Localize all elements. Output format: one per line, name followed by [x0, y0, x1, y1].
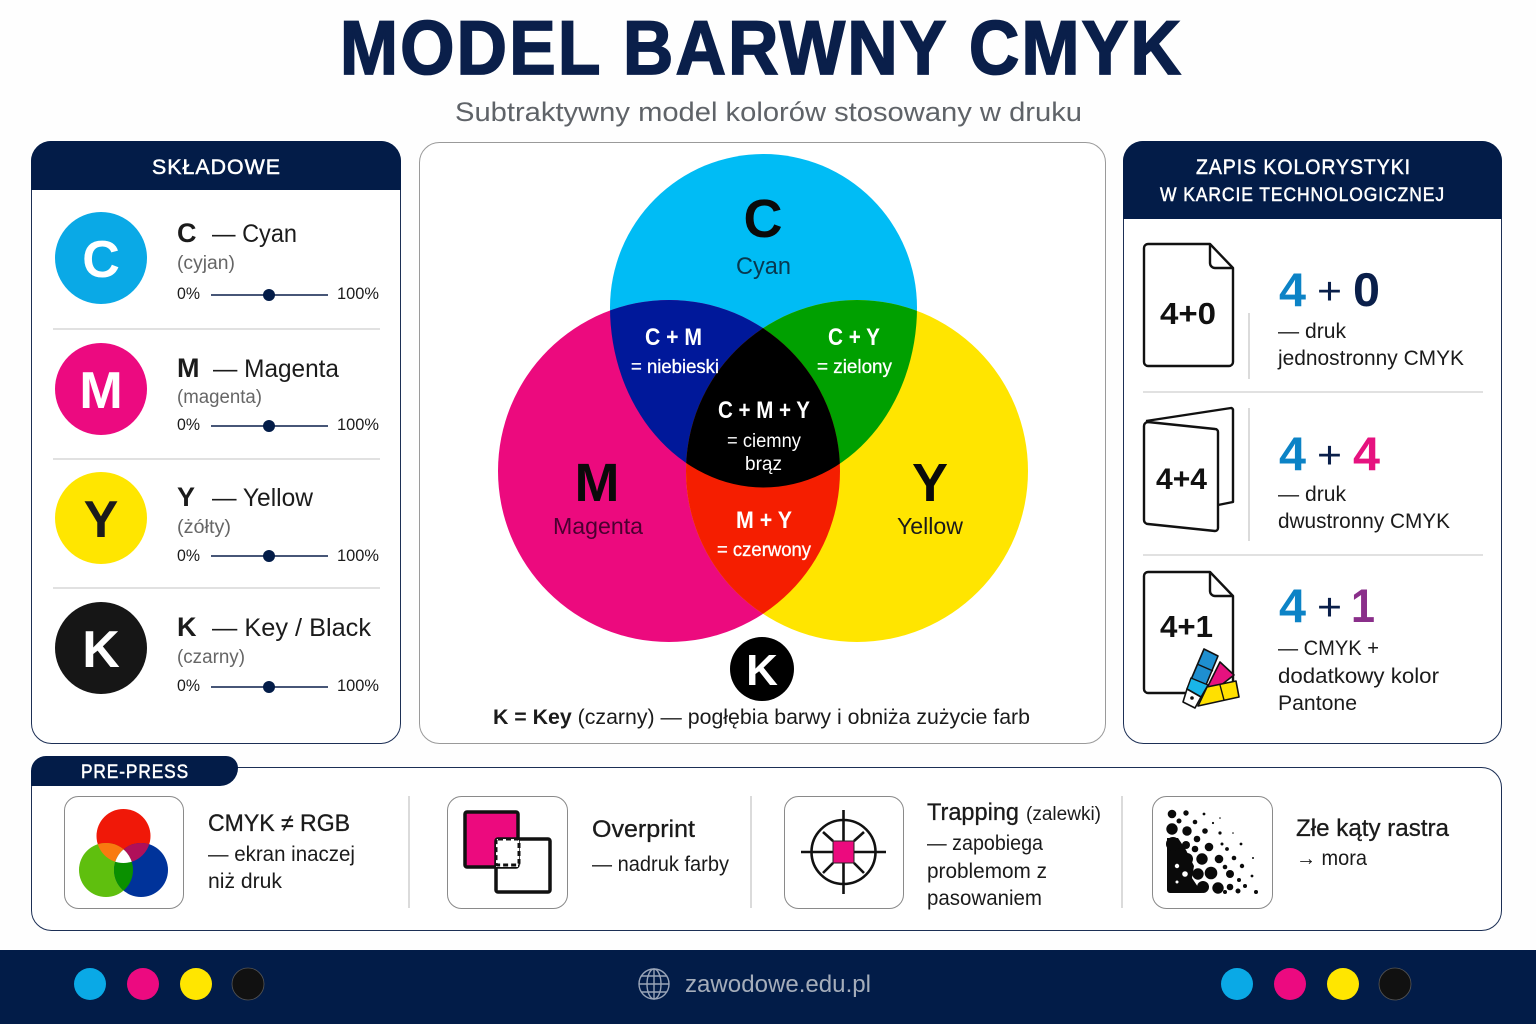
- text: overprint: Overprint: [592, 816, 695, 843]
- format 4+1: dodatkowy kolor: [1278, 665, 1439, 688]
- text: cmyk vs rgb: niż druk: [208, 870, 283, 893]
- text: trapping: [927, 799, 1101, 910]
- text: overprint: — nadruk farby: [592, 853, 729, 876]
- key badge: [730, 637, 794, 701]
- row: key black: 0%: [177, 676, 200, 695]
- panel header: zapis kolorystyki: W KARCIE TECHNOLOGICZNEJ: [1160, 185, 1445, 206]
- text: trapping: (zalewki): [1026, 804, 1101, 825]
- row: cyan: 100%: [337, 284, 379, 303]
- panel header: składowe: SKŁADOWE: [152, 156, 281, 179]
- venn chart: Cyan: [736, 253, 791, 280]
- format 4+4: [1278, 427, 1450, 533]
- venn chart: C: [744, 189, 782, 249]
- title: MODEL BARWNY CMYK: [340, 6, 1183, 91]
- row: magenta: 100%: [337, 415, 379, 434]
- row: key black: [55, 602, 379, 695]
- pre-press tab: [31, 756, 238, 786]
- row: magenta: [55, 343, 379, 435]
- venn chart: = czerwony: [717, 540, 811, 561]
- format 4+4: dwustronny CMYK: [1278, 510, 1450, 533]
- key caption: K = Key (czarny) — pogłębia barwy i obniża zużycie farb: [493, 706, 1030, 729]
- format 4+1: 1: [1351, 579, 1375, 632]
- icon: document 4+1 with pantone fan: [1144, 572, 1239, 708]
- row: magenta: (magenta): [177, 387, 262, 408]
- format 4+0: [1277, 263, 1464, 370]
- row: yellow: 0%: [177, 546, 200, 565]
- text: trapping: pasowaniem: [927, 887, 1042, 910]
- pre-press tab: PRE-PRESS: [81, 762, 189, 783]
- panel: składowe: [31, 141, 401, 744]
- row: cyan: — Cyan: [212, 220, 297, 248]
- row: cyan: C: [82, 231, 120, 289]
- panel: venn diagram: [420, 142, 1106, 744]
- key badge: K: [746, 646, 778, 695]
- row: cyan: C: [177, 218, 196, 248]
- icon: folded sheet 4+4: 4+4: [1156, 463, 1207, 496]
- format 4+4: 4: [1353, 427, 1380, 480]
- row: key black: K: [177, 612, 197, 642]
- format 4+4: — druk: [1278, 483, 1347, 506]
- panel: zapis kolorystyki: [1123, 141, 1502, 744]
- icon: rgb circles: [64, 796, 184, 908]
- row: yellow: (żółty): [177, 517, 231, 538]
- venn chart: C + M: [645, 324, 702, 351]
- text: angles: → mora: [1296, 847, 1367, 870]
- venn chart: Magenta: [553, 513, 643, 539]
- icon: globe: [639, 969, 669, 999]
- footer: [0, 950, 1536, 1024]
- website: zawodowe.edu.pl: [685, 971, 871, 998]
- format 4+4: +: [1317, 435, 1342, 477]
- text: angles: [1296, 815, 1450, 870]
- row: cyan: (cyjan): [177, 253, 235, 274]
- row: key black: — Key / Black: [212, 614, 372, 642]
- venn chart: = ciemny: [727, 431, 801, 452]
- format 4+0: 0: [1353, 263, 1380, 316]
- format 4+0: 4: [1279, 263, 1306, 316]
- icon: document 4+0: [1144, 244, 1233, 366]
- row: yellow: 100%: [337, 546, 379, 565]
- text: cmyk vs rgb: CMYK ≠ RGB: [208, 810, 350, 837]
- format 4+1: [1278, 579, 1439, 715]
- text: angles: Złe kąty rastra: [1296, 815, 1450, 842]
- format 4+0: +: [1317, 271, 1342, 313]
- format 4+1: 4: [1279, 579, 1306, 632]
- text: trapping: Trapping: [927, 799, 1019, 826]
- format 4+0: — druk: [1278, 320, 1347, 343]
- footer dots left: [74, 968, 264, 1000]
- row: yellow: Y: [177, 482, 195, 512]
- venn chart: [498, 154, 1028, 642]
- row: yellow: — Yellow: [212, 484, 314, 512]
- text: trapping: — zapobiega: [927, 832, 1043, 855]
- venn chart: C + M + Y: [718, 397, 810, 424]
- subtitle: Subtraktywny model kolorów stosowany w druku: [455, 97, 1082, 127]
- text: cmyk vs rgb: — ekran inaczej: [208, 843, 355, 866]
- venn chart: Yellow: [897, 513, 963, 539]
- row: key black: 100%: [337, 676, 379, 695]
- format 4+1: +: [1317, 587, 1342, 629]
- venn chart: = zielony: [817, 357, 892, 378]
- row: magenta: M: [79, 362, 123, 420]
- venn chart: = niebieski: [631, 357, 719, 378]
- icon: document 4+0: 4+0: [1160, 296, 1216, 331]
- row: magenta: — Magenta: [213, 355, 339, 383]
- icon: document 4+1 with pantone fan: 4+1: [1160, 609, 1213, 644]
- row: key black: K: [82, 621, 120, 679]
- panel: pre-press: [31, 756, 1502, 930]
- footer dots right: [1221, 968, 1411, 1000]
- row: yellow: [55, 472, 379, 565]
- text: overprint: [592, 816, 729, 876]
- format 4+0: jednostronny CMYK: [1277, 347, 1464, 370]
- venn chart: Y: [912, 453, 948, 513]
- row: yellow: Y: [84, 491, 118, 549]
- venn chart: M: [575, 453, 619, 513]
- format 4+4: 4: [1279, 427, 1306, 480]
- row: magenta: M: [177, 353, 200, 383]
- icon: folded sheet 4+4: [1144, 408, 1233, 531]
- format 4+1: Pantone: [1278, 692, 1357, 715]
- panel header: zapis kolorystyki: ZAPIS KOLORYSTYKI: [1196, 156, 1411, 179]
- icon: trapping target: [784, 796, 904, 908]
- format 4+1: — CMYK +: [1278, 637, 1379, 660]
- venn chart: brąz: [745, 454, 782, 475]
- row: cyan: [55, 212, 379, 304]
- icon: halftone raster: [1152, 796, 1272, 908]
- venn chart: M + Y: [736, 507, 792, 534]
- row: cyan: 0%: [177, 284, 200, 303]
- text: cmyk vs rgb: [208, 810, 355, 893]
- row: magenta: 0%: [177, 415, 200, 434]
- row: key black: (czarny): [177, 647, 245, 668]
- text: trapping: problemom z: [927, 860, 1047, 883]
- panel header: zapis kolorystyki: [1123, 141, 1502, 219]
- venn chart: C + Y: [828, 324, 880, 351]
- icon: overprint: [448, 796, 568, 908]
- panel header: składowe: [31, 141, 401, 190]
